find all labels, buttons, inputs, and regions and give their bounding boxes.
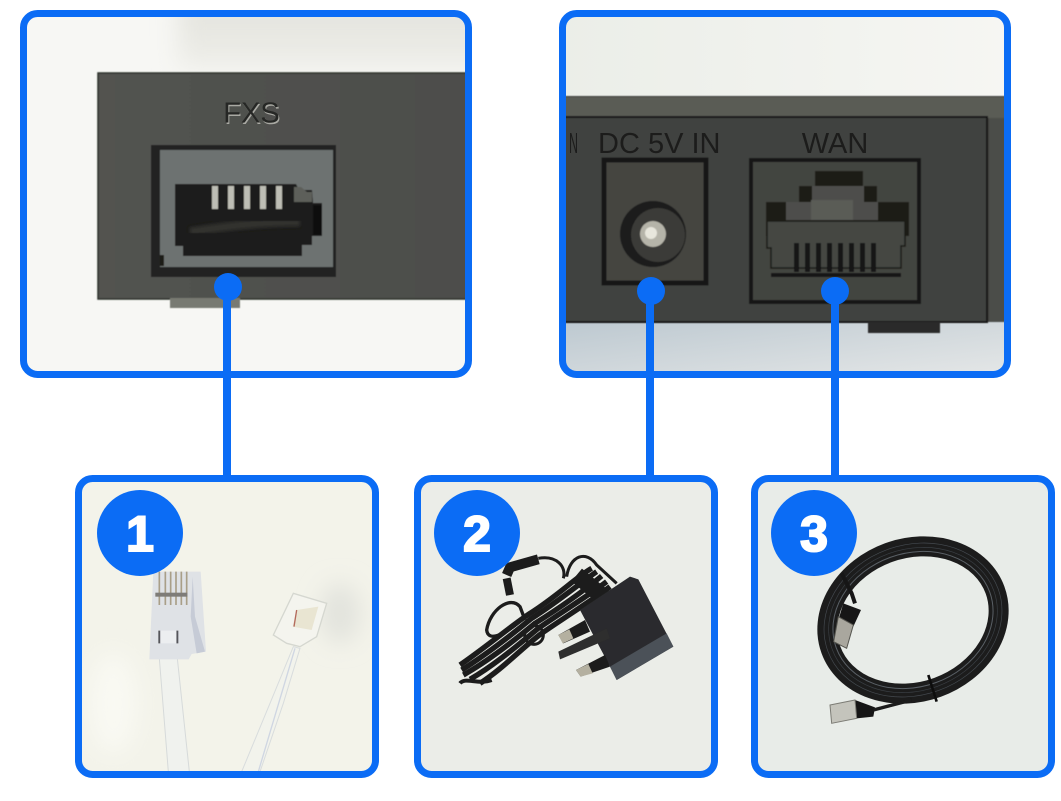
connector line 2 — [637, 277, 665, 477]
photo: coiled ethernet cable — [817, 536, 1009, 724]
panel 3: ethernet cable — [751, 475, 1055, 779]
router body with DC and WAN ports — [559, 96, 1011, 333]
panel: FXS port close-up — [20, 0, 498, 379]
connector line 3 — [821, 277, 849, 477]
labels: port names: DC 5V IN — [598, 128, 720, 160]
router body with FXS port — [98, 73, 473, 308]
panel 2: power adapter — [414, 475, 718, 779]
panel 1: telephone cable — [75, 475, 379, 779]
labels: port names: WAN — [802, 128, 868, 160]
label: FXS: FXS — [223, 98, 280, 130]
badge: 1: 1 — [126, 506, 154, 562]
labels: port names — [570, 132, 866, 154]
DC jack — [604, 160, 706, 283]
WAN socket — [751, 160, 919, 302]
badge: 2 — [434, 490, 520, 576]
connector line 1 — [214, 273, 242, 477]
photo: telephone cable with plugs — [90, 572, 360, 772]
label: FXS: FXS — [224, 99, 281, 131]
badge: 3 — [771, 490, 857, 576]
panel: DC and WAN ports close-up — [559, 10, 1011, 379]
photo: power adapter with coiled cable — [460, 556, 673, 683]
label: FXS — [226, 102, 280, 124]
labels: port names: N — [569, 128, 578, 160]
badge: 2: 2 — [463, 506, 491, 562]
badge: 1 — [97, 490, 183, 576]
badge: 3: 3 — [800, 506, 828, 562]
